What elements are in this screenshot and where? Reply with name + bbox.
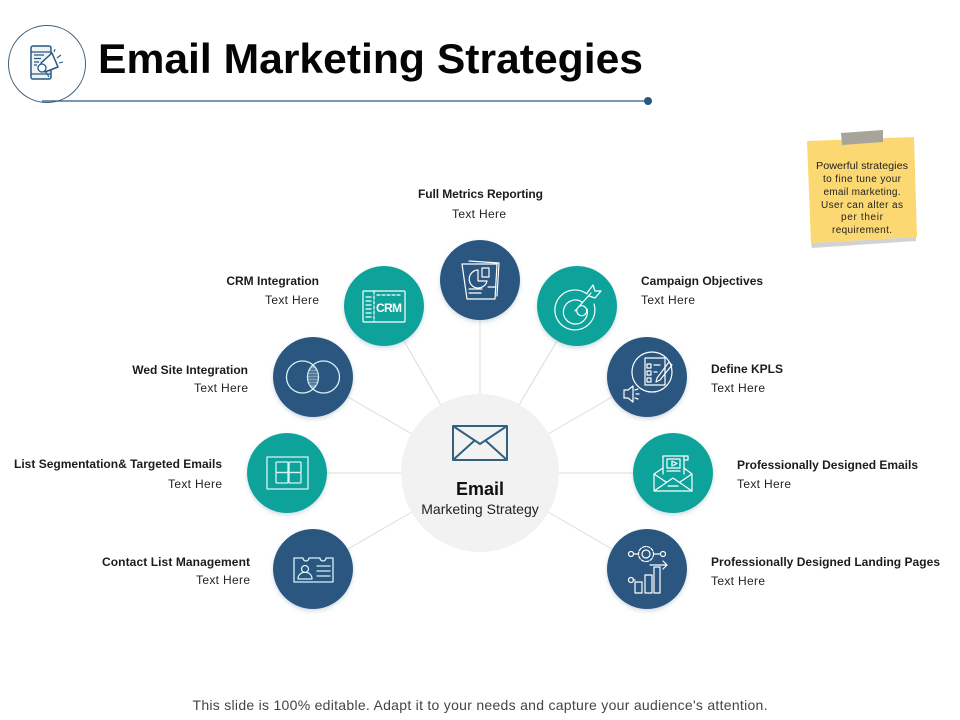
central hub: Email Marketing Strategy: Email <box>456 479 504 499</box>
node: Professionally Designed Landing Pages <box>607 529 940 609</box>
node: Contact List Management: Text Here <box>196 573 250 587</box>
node: Full Metrics Reporting: Full Metrics Reporting <box>418 187 543 201</box>
node: Full Metrics Reporting <box>418 187 543 320</box>
node: Campaign Objectives: Campaign Objectives <box>641 274 763 288</box>
node: CRM Integration <box>226 266 424 346</box>
node: Professionally Designed Emails <box>633 433 918 513</box>
node: CRM Integration: Text Here <box>265 293 319 307</box>
node: Professionally Designed Emails: Professionally Designed Emails <box>737 458 918 472</box>
node: Define KPLS: Text Here <box>711 381 765 395</box>
node: Campaign Objectives: Text Here <box>641 293 695 307</box>
sticky note callout: per their <box>841 212 884 223</box>
node: Campaign Objectives <box>537 266 763 346</box>
sticky note callout <box>807 130 917 248</box>
node: Wed Site Integration: Wed Site Integration <box>132 363 248 377</box>
icon: envelope <box>453 426 507 460</box>
sticky note callout: email marketing. <box>824 187 900 198</box>
sticky note callout: requirement. <box>832 225 892 236</box>
footer note: This slide is 100% editable. Adapt it to your needs and capture your audience's attention. <box>192 697 768 713</box>
node: CRM Integration: CRM <box>376 301 402 315</box>
central hub: Email Marketing Strategy: Marketing Strategy <box>421 501 539 517</box>
node: Contact List Management <box>102 529 353 609</box>
node: Contact List Management: Contact List Management <box>102 555 250 569</box>
sticky note callout: to fine tune your <box>823 174 902 185</box>
node: List Segmentation & Targeted Emails <box>14 433 327 513</box>
header icon: phone with megaphone in a ring <box>8 26 86 102</box>
node: Wed Site Integration <box>132 337 353 417</box>
sticky note callout: Powerful strategies <box>816 161 908 172</box>
node: List Segmentation & Targeted Emails: Text Here <box>168 477 222 491</box>
node: CRM Integration: CRM Integration <box>226 274 319 288</box>
node: Professionally Designed Emails: Text Here <box>737 477 791 491</box>
node: Wed Site Integration: Text Here <box>194 381 248 395</box>
node: Professionally Designed Landing Pages: Text Here <box>711 574 765 588</box>
connector lines from hub to nodes <box>327 320 633 549</box>
title underline with end dot <box>42 97 652 105</box>
node: List Segmentation & Targeted Emails: List Segmentation& Targeted Emails <box>14 457 222 471</box>
node: Full Metrics Reporting: Text Here <box>452 207 506 221</box>
node: Professionally Designed Landing Pages: Professionally Designed Landing Pages <box>711 555 940 569</box>
title: Email Marketing Strategies <box>98 35 643 82</box>
node: Define KPLS <box>607 337 783 417</box>
node: Define KPLS: Define KPLS <box>711 362 783 376</box>
sticky note callout: User can alter as <box>821 200 903 211</box>
central hub: Email Marketing Strategy <box>401 394 559 552</box>
